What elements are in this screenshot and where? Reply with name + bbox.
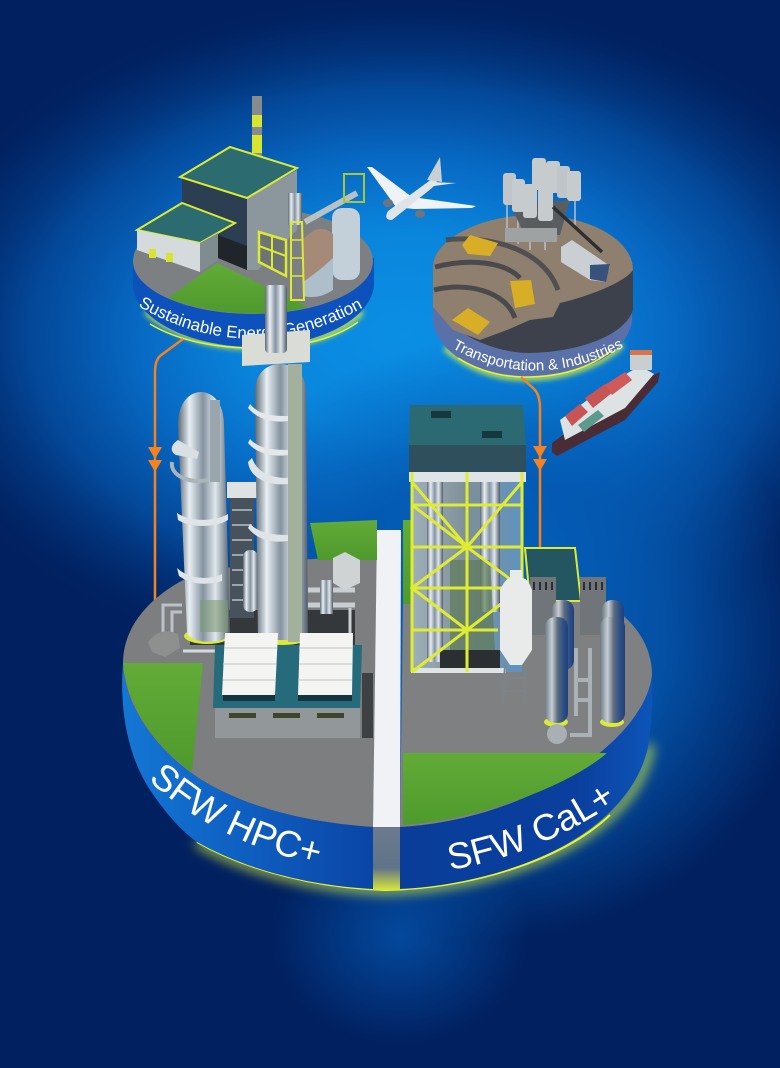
grass patch	[168, 263, 307, 313]
tower roof	[409, 405, 526, 482]
central path	[373, 530, 401, 827]
island label: Sustainable Energy Generation	[140, 298, 362, 338]
arrow: right feed line	[521, 377, 547, 548]
label: SFW HPC+: SFW HPC+	[152, 765, 320, 860]
island band	[433, 290, 632, 378]
cement silos	[503, 158, 602, 252]
platform glow	[197, 745, 650, 890]
panel: sustainable energy generation island	[133, 96, 374, 354]
rooftop stack	[242, 285, 310, 366]
platform right band	[400, 675, 652, 889]
grass patches	[123, 520, 607, 825]
plant ground shadow	[190, 610, 355, 645]
mining trucks	[452, 235, 610, 335]
rock side	[433, 267, 633, 353]
pipes and rack	[148, 482, 360, 657]
silos and conveyor	[259, 174, 364, 300]
tower structure	[411, 472, 522, 673]
power plant building	[137, 147, 297, 272]
arrow: left feed line	[148, 339, 183, 600]
panel: HPC+ plant	[148, 285, 373, 738]
chimney	[252, 96, 262, 158]
platform right top	[400, 575, 652, 827]
tall column	[248, 364, 308, 645]
platform left top	[123, 555, 377, 827]
panel: CaL+ plant	[409, 405, 625, 744]
gas cylinders	[544, 600, 625, 744]
label: SFW CaL+: SFW CaL+	[448, 788, 610, 868]
island top surface	[133, 208, 373, 314]
quarry top	[433, 215, 633, 340]
island base band	[133, 258, 374, 348]
panel: transportation and industries island	[433, 158, 633, 385]
left column	[172, 392, 230, 644]
platform centre gap	[373, 827, 400, 890]
icon: airplane	[367, 157, 476, 220]
warehouse	[213, 633, 373, 738]
coolers and solar panel	[525, 548, 606, 635]
icon: container ship	[552, 350, 660, 456]
quarry terraces	[434, 239, 558, 318]
platform left band	[122, 663, 373, 889]
platform glow line	[197, 815, 610, 890]
panel: main platform	[122, 520, 662, 904]
island label: Transportation & Industries	[456, 339, 622, 371]
white silo	[500, 570, 532, 703]
